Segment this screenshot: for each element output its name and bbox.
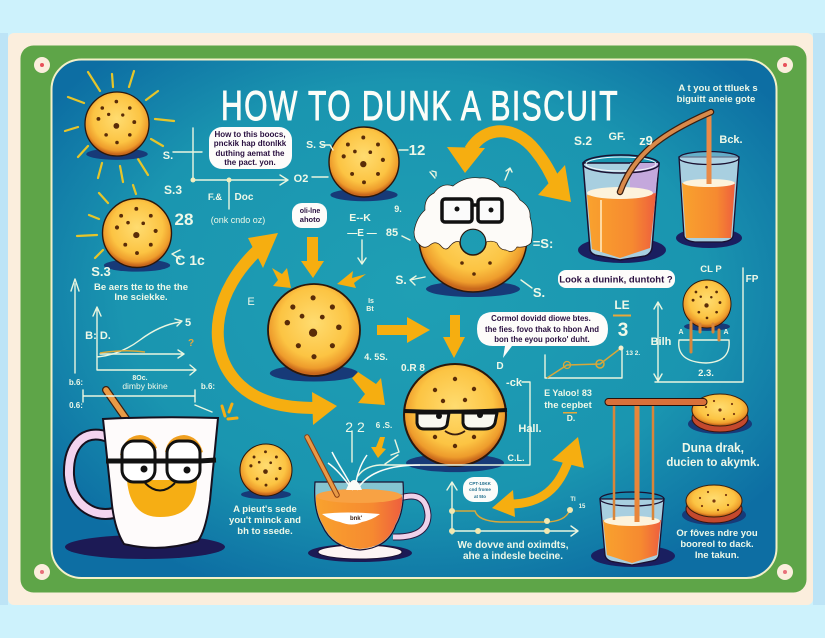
fraction label: 3 — [618, 320, 628, 341]
centre labels: the cepbet — [544, 400, 593, 411]
yellow accent marks — [222, 404, 237, 419]
biscuit: small lower — [240, 444, 292, 499]
fraction label: LE — [614, 298, 630, 312]
top centre labels: Bt — [366, 306, 374, 313]
top right labels: GF. — [608, 131, 626, 143]
arrow: small right — [337, 271, 366, 288]
iced donut character — [414, 178, 532, 297]
caption: small biscuit: you't minck and — [229, 515, 301, 526]
dunking rod and bottom glass — [591, 394, 752, 567]
speech bubble: middle: Cormol dovidd diowe btes. — [491, 314, 591, 323]
dunk diagram right — [651, 264, 759, 382]
caption: right bottom: Ine takun. — [695, 550, 739, 561]
caption: right bottom — [676, 528, 758, 561]
speech bubble: top: the pact. yon. — [224, 158, 276, 167]
top centre labels: =S: — [533, 236, 553, 251]
glass left with straw — [578, 155, 666, 263]
blue panel — [52, 60, 776, 578]
caption: right bottom: Or fôves ndre you — [676, 528, 758, 539]
chart: lower left: B: D. — [85, 330, 111, 342]
tea cup with splash: bnk' — [350, 516, 363, 522]
title: HOW TO DUNK A BISCUIT — [221, 82, 619, 129]
arrow: top curved double-headed — [447, 131, 571, 202]
side band right — [813, 33, 825, 605]
arrow: large left arc — [218, 233, 337, 425]
arrow: bottom curved double-headed — [492, 437, 584, 517]
tea cup with splash — [307, 437, 428, 562]
biscuit: second left — [102, 198, 172, 272]
bottom chart: at 5to — [474, 494, 486, 499]
biscuit: top left — [85, 92, 149, 160]
bottom chart: Tl — [570, 497, 576, 503]
centre labels: C.L. — [508, 453, 524, 463]
top right labels: Bck. — [719, 134, 743, 146]
biscuit with glasses character — [404, 364, 507, 472]
speech bubble: top: pnckik hap dtonlkk — [214, 139, 287, 148]
top centre labels: E — [247, 296, 255, 308]
chart: lower left — [69, 279, 215, 412]
top centre labels: 9. — [394, 204, 402, 214]
caption: small biscuit: A pieut's sede — [233, 504, 297, 515]
biscuit: top centre — [329, 127, 399, 201]
caption: right bottom: booreol to dack. — [680, 539, 754, 550]
left labels: S. — [163, 150, 173, 162]
speech bubble: small: ahoto — [300, 215, 321, 224]
top centre labels: S. — [395, 273, 407, 287]
mug character with glasses — [65, 390, 225, 559]
axis diagram top: Doc — [235, 192, 254, 203]
dunk diagram right: A — [723, 329, 729, 336]
top centre labels: —E — — [347, 228, 377, 239]
left labels: Be aers tte to the the — [94, 282, 188, 293]
bottom chart: ahe a indesle becine. — [463, 551, 563, 562]
top right labels — [574, 83, 758, 148]
bottom chart: We dovve and oximdts, — [458, 540, 569, 551]
bottom chart: cnd frome — [469, 487, 491, 492]
top right labels: A t you ot ttluek s — [678, 83, 758, 94]
chart: lower left: b.6: — [201, 382, 215, 391]
centre labels: -ck — [506, 377, 523, 389]
arrow: diagonal to glasses biscuit — [352, 372, 385, 405]
top right labels: S.2 — [574, 134, 592, 148]
top centre labels: 85 — [386, 227, 398, 239]
centre labels: 2 2 — [345, 419, 365, 435]
flat biscuit lower — [682, 485, 746, 525]
arrow: small left — [272, 268, 291, 288]
top centre labels: S. — [533, 285, 545, 300]
speech bubble: middle — [477, 312, 608, 358]
centre labels — [345, 352, 593, 476]
caption: right middle: Duna drak, — [682, 440, 744, 455]
bent straw — [620, 112, 711, 192]
dunk diagram right: A — [678, 329, 684, 336]
arrow: small down to cup — [371, 437, 386, 458]
caption: small biscuit: bh to ssede. — [237, 526, 293, 537]
arrow: centre right — [377, 317, 430, 343]
dunk diagram right: Bilh — [651, 336, 672, 348]
speech bubble: top — [209, 127, 292, 169]
centre labels: E Yaloo! 83 — [544, 388, 592, 398]
top centre labels: S. S — [306, 139, 326, 151]
top right labels: biguitt aneie gote — [677, 94, 755, 105]
sun rays — [65, 71, 174, 258]
caption: right middle: ducien to akymk. — [666, 457, 760, 469]
left labels: 28 — [175, 210, 193, 229]
caption: right middle — [666, 440, 760, 469]
speech bubble: small — [292, 203, 327, 228]
top centre labels: 12 — [409, 142, 425, 159]
centre labels: 4. 5S. — [364, 352, 388, 362]
speech bubble: small: oli-lne — [300, 208, 320, 215]
chart: lower left: 5 — [185, 317, 191, 329]
arrow: centre down — [443, 315, 465, 358]
left labels: S.3 — [91, 264, 111, 279]
speech bubble: look a dunk: Look a dunink, duntoht ? — [559, 274, 673, 286]
bottom chart: 15 — [579, 504, 586, 510]
axis diagram top: F.& — [208, 192, 222, 203]
axis diagram top: (onk cndo oz) — [211, 215, 265, 225]
top centre labels: O2 — [294, 173, 308, 185]
fraction label — [613, 298, 631, 341]
centre labels: D — [496, 361, 504, 372]
top right labels: z9 — [639, 133, 653, 148]
left labels — [91, 150, 205, 303]
bottom chart — [447, 477, 586, 562]
arrow: down into big biscuit — [301, 237, 324, 278]
centre labels: 6 .S. — [376, 421, 392, 430]
side band left — [0, 33, 8, 605]
small line chart right: 13 2. — [626, 350, 640, 357]
top centre labels — [247, 139, 553, 313]
centre labels: 0.R 8 — [401, 363, 425, 374]
glass right with drip — [676, 115, 742, 248]
corner pins — [34, 57, 793, 580]
top centre labels: E--K — [349, 212, 371, 224]
speech bubble: middle: the fies. fovo thak to hbon And — [485, 325, 599, 334]
centre labels: Hall. — [518, 423, 542, 435]
left labels: Ine sciekke. — [114, 292, 168, 303]
dunk diagram right: CL P — [700, 264, 722, 275]
caption: small biscuit — [229, 504, 301, 537]
centre labels: D. — [567, 413, 575, 423]
chart: lower left: 0.6: — [69, 401, 83, 410]
dunk diagram right: FP — [746, 274, 759, 285]
top centre labels: Is — [368, 298, 374, 305]
chart: lower left: ? — [188, 338, 194, 349]
chart: lower left: 8Oc. — [132, 375, 148, 382]
dunk diagram right: 2.3. — [698, 368, 714, 379]
chart: lower left: b.6: — [69, 378, 83, 387]
speech bubble: top: How to this boocs, — [214, 130, 286, 139]
speech bubble: top: duthing aemat the — [216, 149, 285, 158]
biscuit: centre large — [268, 284, 360, 382]
axis diagram top — [173, 128, 288, 225]
small line chart right — [545, 346, 640, 378]
bottom chart: CPT-10KK — [469, 481, 492, 486]
chart: lower left: dimby bkine — [122, 381, 168, 391]
speech bubble: look a dunk — [558, 270, 675, 288]
left labels: S.3 — [164, 183, 182, 197]
speech bubble: middle: bon the eyou porko' duht. — [494, 335, 590, 344]
left labels: C 1c — [175, 252, 205, 268]
